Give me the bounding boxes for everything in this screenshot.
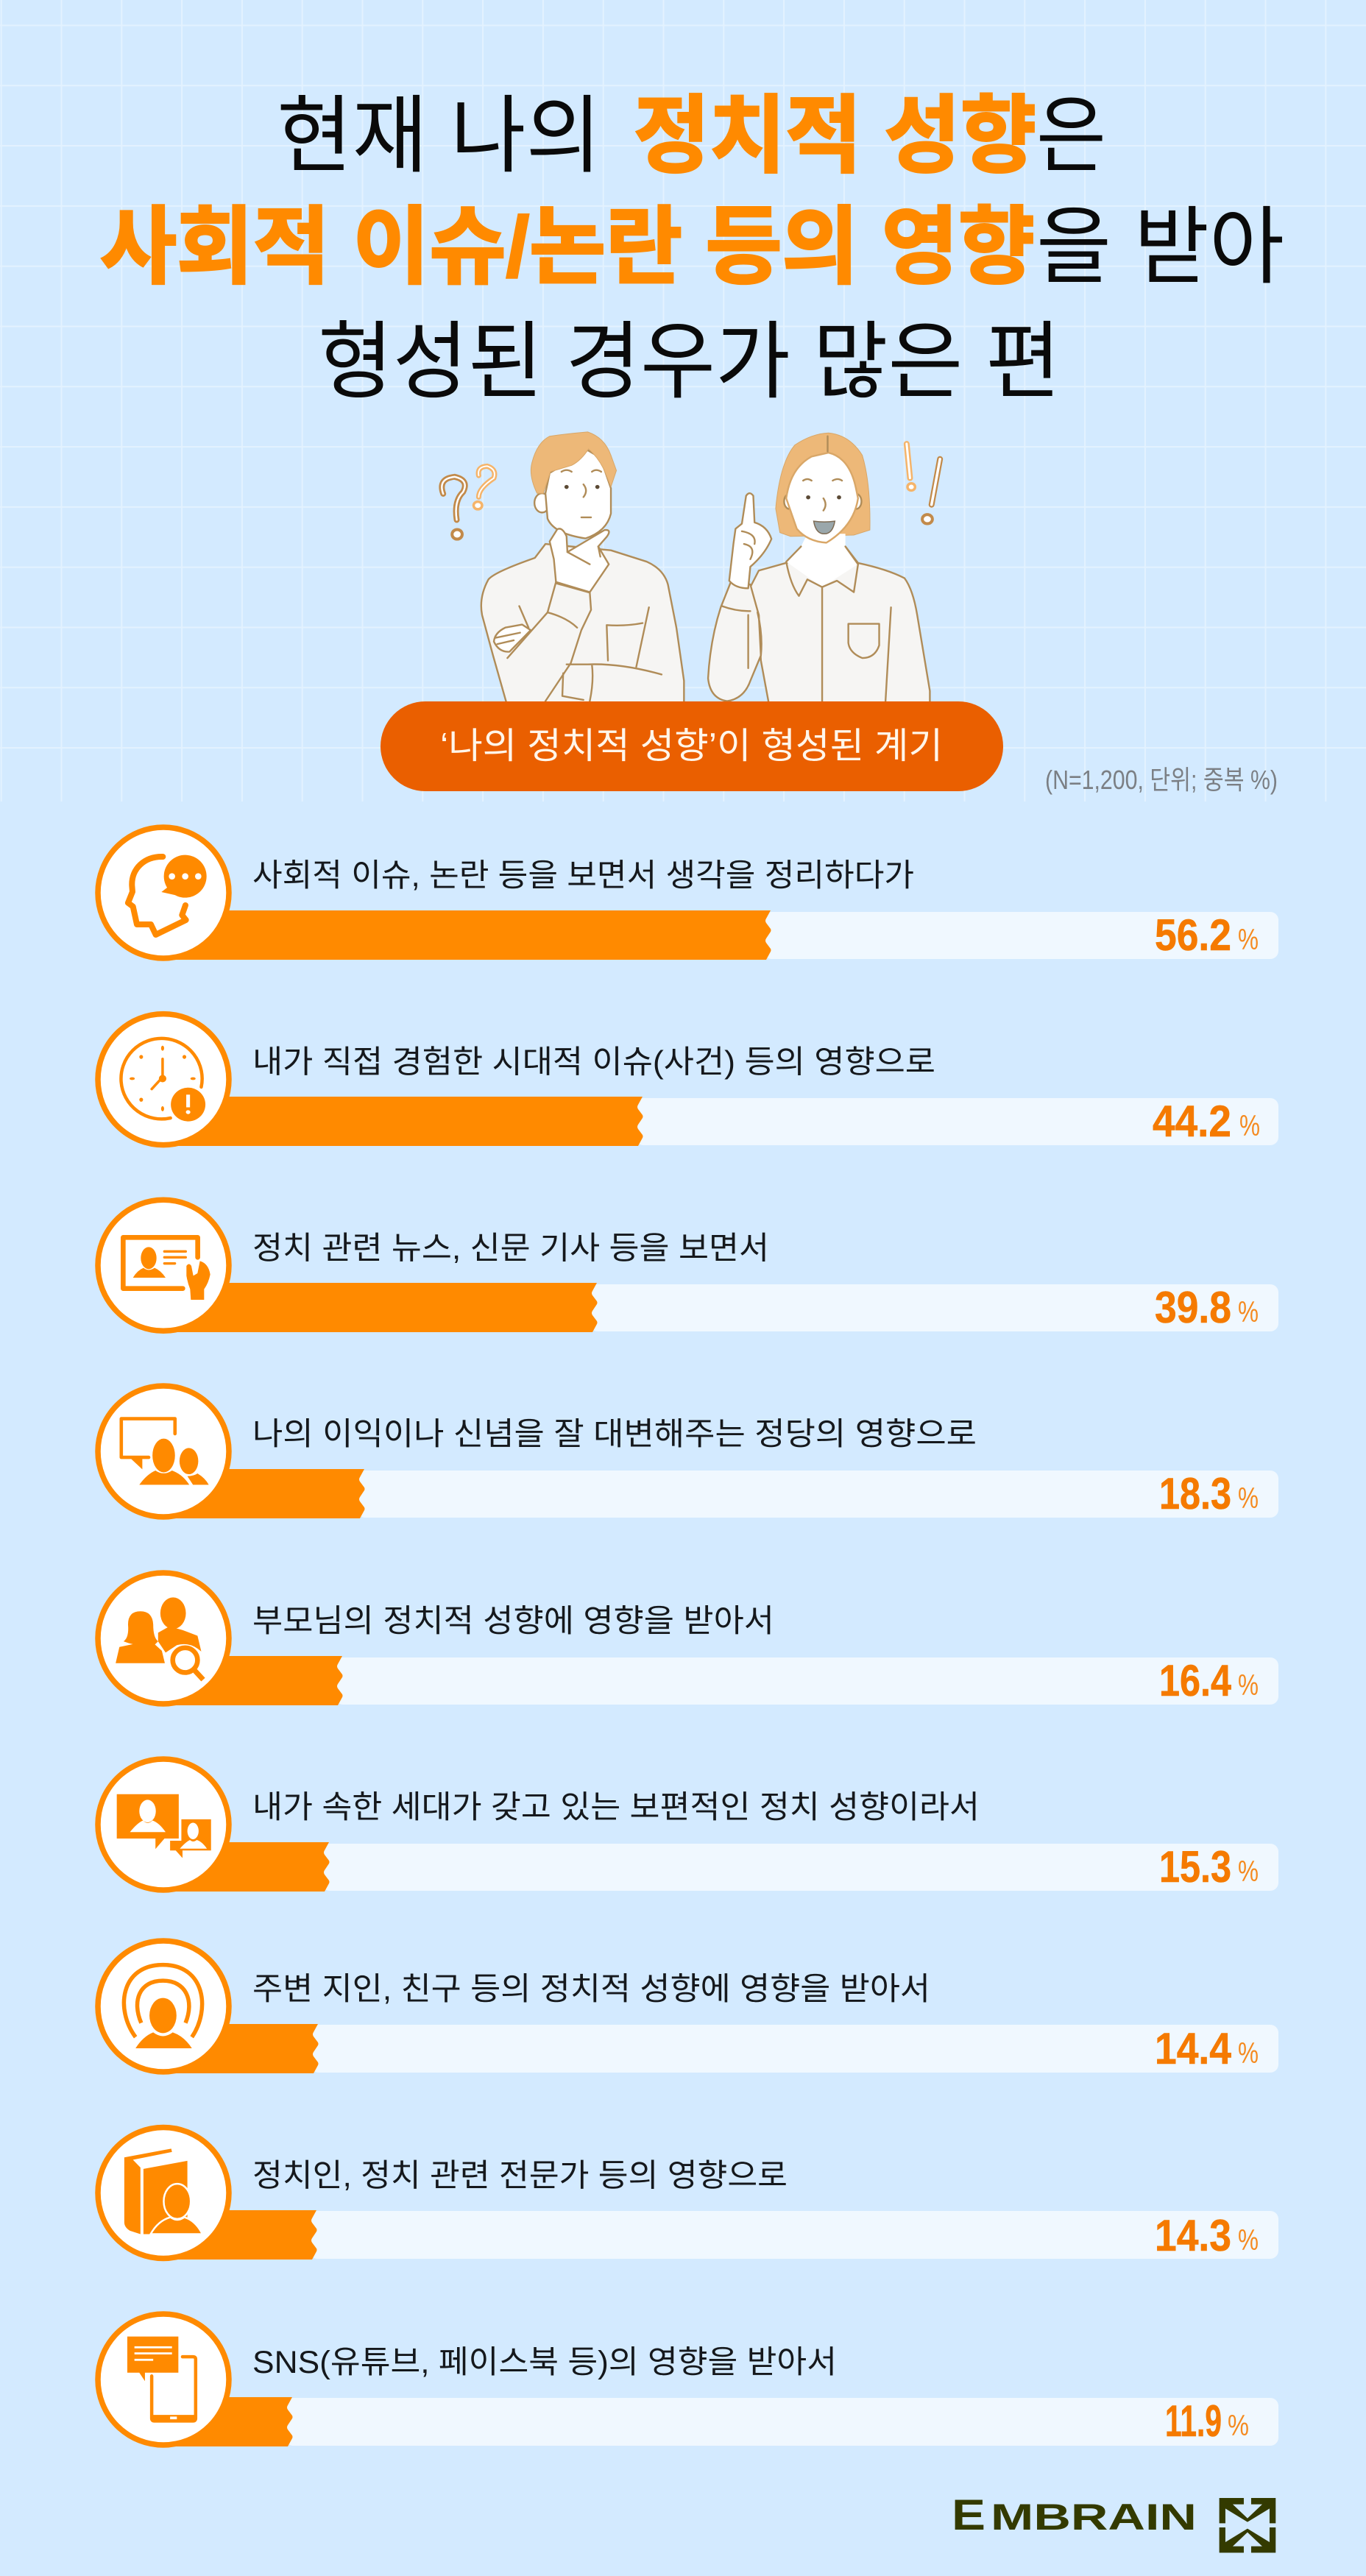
value: 15.3 — [1159, 1842, 1231, 1892]
label: 정치인, 정치 관련 전문가 등의 영향으로 — [252, 2158, 788, 2193]
title: 현재 나의 — [277, 89, 601, 183]
title: 사회적 이슈/논란 등의 영향 — [100, 200, 1035, 294]
icon: screen presentation with hand — [123, 1237, 210, 1300]
value: % — [1238, 1482, 1259, 1515]
value: % — [1239, 1110, 1260, 1142]
row 3: 39.8% — [98, 1200, 1278, 1332]
value: 14.3 — [1155, 2211, 1231, 2260]
label: 사회적 이슈, 논란 등을 보면서 생각을 정리하다가 — [252, 858, 914, 894]
value: 18.3 — [1159, 1469, 1231, 1518]
woman pointing — [708, 433, 930, 707]
title: 형성된 경우가 많은 편 — [318, 315, 1061, 409]
title: 정치적 성향 — [634, 89, 1036, 183]
label: 나의 이익이나 신념을 잘 대변해주는 정당의 영향으로 — [252, 1417, 977, 1452]
label: 주변 지인, 친구 등의 정치적 성향에 영향을 받아서 — [252, 1972, 930, 2007]
label: 내가 직접 경험한 시대적 이슈(사건) 등의 영향으로 — [252, 1045, 935, 1080]
logo: Embrain — [952, 2491, 1275, 2552]
row 5: 16.4% — [98, 1573, 1278, 1705]
value: % — [1238, 2224, 1259, 2257]
value: % — [1238, 2037, 1259, 2070]
icon: two video speech bubbles — [117, 1794, 211, 1858]
icon: clock with alert — [121, 1038, 205, 1122]
man thinking — [481, 432, 684, 707]
note: sample size and unit: (N=1,200, 단위; 중복 %) — [1045, 765, 1278, 795]
row 4: 18.3% — [98, 1386, 1278, 1518]
value: % — [1228, 2410, 1249, 2442]
icon: logo mark — [1220, 2498, 1275, 2552]
value: 39.8 — [1155, 1283, 1231, 1332]
row 1: 56.2% — [98, 827, 1278, 960]
label: SNS(유튜브, 페이스북 등)의 영향을 받아서 — [252, 2345, 837, 2380]
row 9: 11.9% — [98, 2314, 1278, 2446]
value: % — [1238, 924, 1259, 956]
value: 44.2 — [1153, 1097, 1231, 1146]
icon: parents with magnifier — [116, 1597, 203, 1680]
logo: Embrain: MBRAIN — [991, 2497, 1197, 2538]
value: 16.4 — [1159, 1656, 1232, 1705]
illustration: two people thinking — [442, 432, 940, 707]
icon: speech bubble with two people — [121, 1419, 209, 1485]
title: 은 — [1036, 89, 1106, 183]
label: 정치 관련 뉴스, 신문 기사 등을 보면서 — [252, 1231, 769, 1266]
row 2: 44.2% — [98, 1014, 1278, 1146]
row 8: 14.3% — [98, 2127, 1278, 2260]
callout: section heading pill: ‘나의 정치적 성향’이 형성된 계기 — [440, 726, 943, 766]
icon: book with person — [124, 2148, 202, 2234]
value: 56.2 — [1155, 910, 1231, 960]
logo: Embrain: E — [952, 2491, 985, 2539]
label: 부모님의 정치적 성향에 영향을 받아서 — [252, 1604, 774, 1639]
icon: phone with message bubble — [127, 2337, 197, 2422]
icon: head with speech bubble — [128, 855, 207, 935]
value: 11.9 — [1165, 2396, 1222, 2446]
icon: question marks — [442, 466, 495, 539]
value: % — [1238, 1296, 1259, 1328]
label: 내가 속한 세대가 갖고 있는 보편적인 정치 성향이라서 — [252, 1790, 980, 1825]
value: 14.4 — [1155, 2024, 1232, 2073]
row 7: 14.4% — [98, 1941, 1278, 2073]
row 6: 15.3% — [98, 1759, 1278, 1892]
value: % — [1238, 1855, 1259, 1888]
icon: exclamation marks — [907, 444, 940, 524]
title: 을 받아 — [1036, 200, 1284, 294]
callout: section heading pill — [381, 701, 1003, 791]
title — [100, 89, 1284, 409]
icon: person with signal rings — [124, 1965, 202, 2048]
value: % — [1238, 1669, 1259, 1702]
